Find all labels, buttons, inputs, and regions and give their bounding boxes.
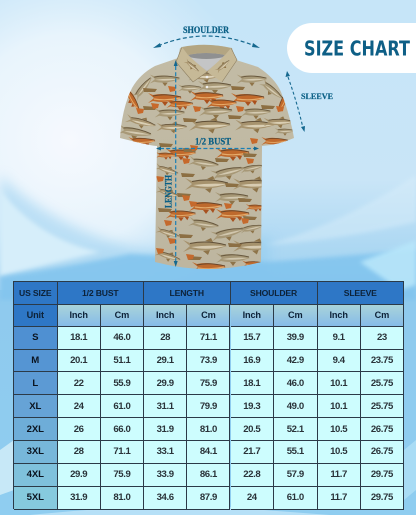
size table: 61.0 bbox=[287, 492, 304, 503]
size table: 42.9 bbox=[287, 355, 304, 366]
size table: 18.1 bbox=[243, 378, 260, 389]
size table: 49.0 bbox=[287, 401, 304, 412]
size table: 71.1 bbox=[113, 446, 130, 457]
size table: 28 bbox=[74, 446, 84, 457]
size table: 29.75 bbox=[371, 469, 393, 480]
size table: M bbox=[31, 355, 39, 366]
size table: 26.75 bbox=[371, 446, 393, 457]
size table: 66.0 bbox=[113, 424, 130, 435]
size table: 20.5 bbox=[243, 424, 260, 435]
size table: 71.1 bbox=[200, 332, 217, 343]
length label: LENGTH bbox=[164, 175, 174, 208]
size table: 51.1 bbox=[113, 355, 130, 366]
size table: 55.9 bbox=[113, 378, 130, 389]
size table: US SIZE bbox=[19, 288, 51, 298]
size table: 20.1 bbox=[70, 355, 87, 366]
size table: 18.1 bbox=[70, 332, 87, 343]
size table bbox=[13, 281, 404, 509]
size table: 25.75 bbox=[371, 378, 393, 389]
size table: 25.75 bbox=[371, 401, 393, 412]
size table: 31.1 bbox=[157, 401, 174, 412]
size table: 23.75 bbox=[371, 355, 393, 366]
size table: 79.9 bbox=[200, 401, 217, 412]
size table: 31.9 bbox=[157, 424, 174, 435]
size table: 29.9 bbox=[157, 378, 174, 389]
size table: XL bbox=[29, 401, 41, 412]
size table: 86.1 bbox=[200, 469, 217, 480]
bust label: 1/2 BUST bbox=[195, 138, 232, 148]
size table: 15.7 bbox=[243, 332, 260, 343]
size table: Cm bbox=[115, 310, 129, 320]
polo shirt illustration with fish pattern and measurement marks bbox=[120, 23, 416, 269]
row 3XL bbox=[14, 441, 404, 464]
size table: 26 bbox=[74, 424, 84, 435]
size table: 29.75 bbox=[371, 492, 393, 503]
size table: Inch bbox=[243, 310, 261, 320]
size table: 9.4 bbox=[333, 355, 345, 366]
row L bbox=[14, 372, 404, 395]
size table: 75.9 bbox=[200, 378, 217, 389]
size table: 22.8 bbox=[243, 469, 260, 480]
size table: 29.1 bbox=[157, 355, 174, 366]
size table: 39.9 bbox=[287, 332, 304, 343]
size table: 33.9 bbox=[157, 469, 174, 480]
size table: 31.9 bbox=[70, 492, 87, 503]
size table: 19.3 bbox=[243, 401, 260, 412]
size table: 21.7 bbox=[243, 446, 260, 457]
bust dashed line bbox=[156, 146, 259, 150]
size table: 87.9 bbox=[200, 492, 217, 503]
size table: Cm bbox=[375, 310, 389, 320]
size table: Inch bbox=[156, 310, 174, 320]
sleeve arrow bbox=[286, 71, 305, 132]
size table: L bbox=[32, 378, 38, 389]
sleeve label: SLEEVE bbox=[301, 91, 333, 101]
length dashed line bbox=[174, 60, 178, 267]
shoulder arrow bbox=[153, 36, 260, 48]
size table: 34.6 bbox=[157, 492, 174, 503]
size table: Inch bbox=[330, 310, 348, 320]
size table: SLEEVE bbox=[344, 288, 377, 298]
size table: 46.0 bbox=[287, 378, 304, 389]
size table: 84.1 bbox=[200, 446, 217, 457]
size table: 81.0 bbox=[200, 424, 217, 435]
size table: 73.9 bbox=[200, 355, 217, 366]
size table: 16.9 bbox=[243, 355, 260, 366]
collar bbox=[176, 45, 237, 88]
size table: 5XL bbox=[27, 492, 44, 503]
size table: 10.5 bbox=[330, 424, 347, 435]
size table: 2XL bbox=[27, 424, 44, 435]
size table: Cm bbox=[201, 310, 216, 320]
size table: LENGTH bbox=[170, 288, 204, 298]
size table: Cm bbox=[288, 310, 302, 320]
size table: 75.9 bbox=[113, 469, 130, 480]
row XL bbox=[14, 395, 404, 418]
size table: 46.0 bbox=[113, 332, 130, 343]
size table: 29.9 bbox=[70, 469, 87, 480]
size table: 1/2 BUST bbox=[82, 288, 119, 298]
unit row bbox=[14, 305, 404, 327]
size table: 10.1 bbox=[330, 378, 347, 389]
size table: 23 bbox=[377, 332, 387, 343]
row 5XL bbox=[14, 487, 404, 510]
size table: 24 bbox=[74, 401, 84, 412]
size table: 22 bbox=[74, 378, 84, 389]
shoulder label: SHOULDER bbox=[183, 26, 229, 36]
size table: Inch bbox=[70, 310, 88, 320]
size table: Unit bbox=[27, 310, 44, 320]
size table: 28 bbox=[160, 332, 170, 343]
size table: 24 bbox=[247, 492, 257, 503]
size table: 3XL bbox=[27, 446, 44, 457]
size table: 55.1 bbox=[287, 446, 304, 457]
size table: 61.0 bbox=[113, 401, 130, 412]
row M bbox=[14, 350, 404, 372]
size table: S bbox=[32, 332, 38, 343]
row 4XL bbox=[14, 464, 404, 487]
size table: 11.7 bbox=[330, 469, 347, 480]
size table: 9.1 bbox=[333, 332, 345, 343]
size table: 52.1 bbox=[287, 424, 304, 435]
size table: 10.5 bbox=[330, 446, 347, 457]
shirt body bbox=[117, 40, 295, 275]
size table: 33.1 bbox=[157, 446, 174, 457]
header row bbox=[14, 282, 404, 305]
size table: SHOULDER bbox=[250, 288, 297, 298]
size table: 26.75 bbox=[371, 424, 393, 435]
size table: 11.7 bbox=[330, 492, 347, 503]
size chart badge bbox=[287, 23, 416, 73]
size table: 57.9 bbox=[287, 469, 304, 480]
size table: 4XL bbox=[27, 469, 44, 480]
size table: 10.1 bbox=[330, 401, 347, 412]
row 2XL bbox=[14, 418, 404, 441]
size table: 81.0 bbox=[113, 492, 130, 503]
row S bbox=[14, 327, 404, 350]
